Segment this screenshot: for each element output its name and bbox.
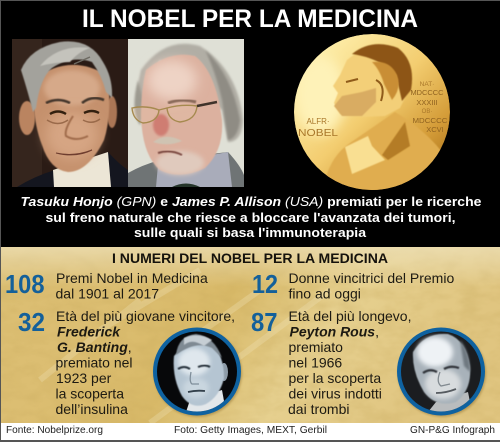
portrait: Peyton Rous xyxy=(395,325,487,417)
medal inscriptions: XCVI xyxy=(426,125,444,134)
stat: 32: G. Banting xyxy=(57,339,128,355)
stat: 32: , xyxy=(128,339,132,355)
stat: 32 xyxy=(18,307,235,417)
stat: 108: Premi Nobel in Medicina xyxy=(56,270,208,286)
intro text: Tasuku Honjo (GPN) e James P. Allison (USA) premiati per le ricerche xyxy=(20,194,482,209)
stat: 32: dell’insulina xyxy=(56,401,128,417)
stat: 32: premiato nel xyxy=(56,354,133,370)
medal portrait: Alfred Nobel profile xyxy=(325,44,442,198)
stat: 87: 87 xyxy=(251,307,278,337)
medal inscriptions: ALFR· xyxy=(306,117,330,126)
stat: 87: dei virus indotti xyxy=(288,386,382,402)
footer: Fonte: Nobelprize.org xyxy=(6,425,103,436)
stat: 87: Età del più longevo, xyxy=(288,308,411,324)
stat: 108: 108 xyxy=(5,269,44,299)
intro text: sulle quali si basa l'immunoterapia xyxy=(134,225,367,240)
stat: 108: dal 1901 al 2017 xyxy=(56,286,159,302)
footer: Foto: Getty Images, MEXT, Gerbil xyxy=(174,425,327,436)
medal inscriptions: XXXIII xyxy=(416,98,438,107)
medal inscriptions xyxy=(298,81,448,139)
medal inscriptions: NAT· xyxy=(420,81,434,88)
intro text: sul freno naturale che riesce a bloccare l'avanzata dei tumori, xyxy=(46,210,456,225)
stat: 12 xyxy=(252,269,454,302)
stat: 87: dai trombi xyxy=(288,401,349,417)
stat: 12: Donne vincitrici del Premio xyxy=(288,270,454,286)
stat: 87: per la scoperta xyxy=(288,370,381,386)
title: IL NOBEL PER LA MEDICINA xyxy=(82,5,418,33)
photo: James P. Allison xyxy=(128,39,244,187)
stat: 32: Età del più giovane vincitore, xyxy=(56,308,235,324)
stat: 12: 12 xyxy=(252,269,278,299)
stat: 32: 32 xyxy=(18,307,45,337)
medal inscriptions: MDCCCC xyxy=(412,116,448,125)
stat: 87: , xyxy=(375,324,379,340)
stat: 32: la scoperta xyxy=(56,386,124,402)
medal xyxy=(294,34,450,198)
footer xyxy=(0,423,500,442)
medal inscriptions: OB· xyxy=(422,109,432,115)
footer: GN-P&G Infograph xyxy=(410,425,495,436)
stat: 32: Frederick xyxy=(57,324,121,340)
stat: 108 xyxy=(5,269,208,302)
gold statistics panel xyxy=(1,247,500,423)
medal inscriptions: MDCCCC xyxy=(410,88,444,97)
statistics heading: I NUMERI DEL NOBEL PER LA MEDICINA xyxy=(112,251,388,266)
stat: 12: fino ad oggi xyxy=(288,286,361,302)
medal inscriptions: NOBEL xyxy=(298,128,339,139)
stat: 87 xyxy=(251,307,411,417)
stat: 32: 1923 per xyxy=(56,370,112,386)
stat: 87: Peyton Rous xyxy=(290,324,375,340)
photo: Tasuku Honjo xyxy=(12,39,128,187)
stat: 87: nel 1966 xyxy=(288,354,342,370)
stat: 87: premiato xyxy=(288,339,343,355)
portrait: Frederick G. Banting xyxy=(150,325,244,419)
intro text xyxy=(20,194,482,240)
